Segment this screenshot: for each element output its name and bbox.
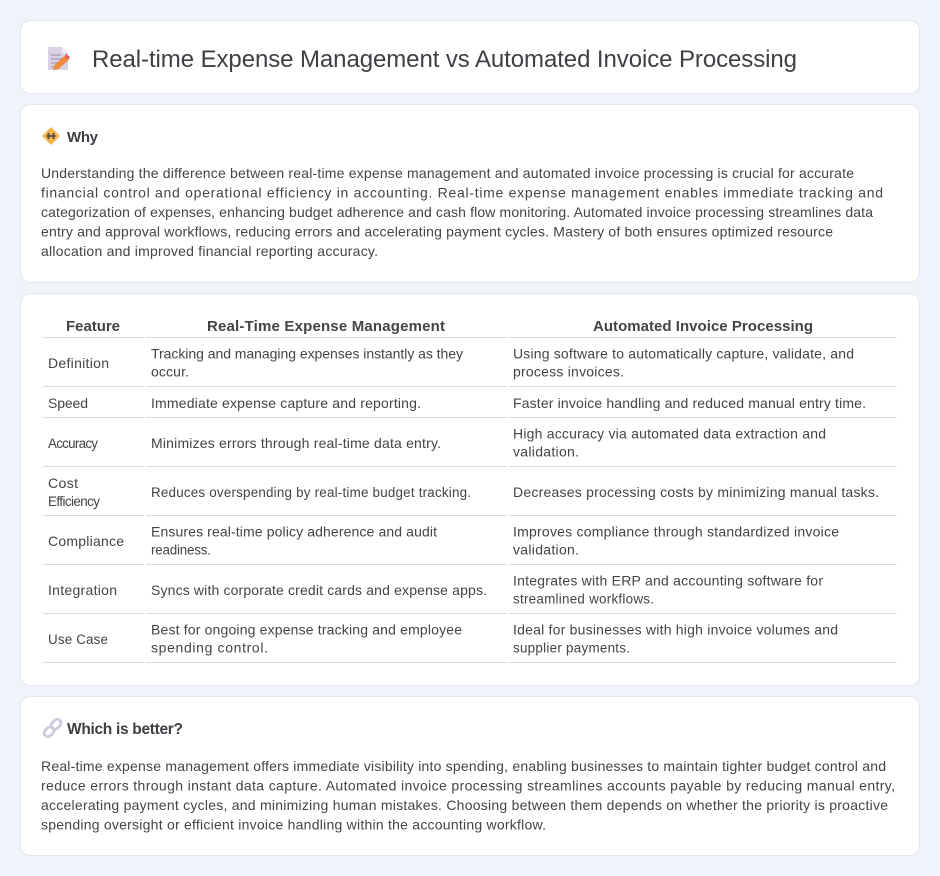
table header xyxy=(43,318,897,338)
conclusion paragraph: reduce errors through instant data capture. Automated invoice processing streamlines accounts payable by reducing manual entry, xyxy=(41,778,895,794)
icon: link xyxy=(42,718,63,738)
icon: warning diamond xyxy=(43,128,59,144)
conclusion paragraph: spending oversight or efficient invoice handling within the accounting workflow. xyxy=(41,816,546,832)
table header: Real-Time Expense Management xyxy=(207,318,445,335)
row: cost efficiency xyxy=(43,475,897,516)
row: integration: Syncs with corporate credit cards and expense apps. xyxy=(151,582,487,598)
row: speed xyxy=(43,395,897,418)
panel: which is better xyxy=(20,696,920,856)
why paragraph: allocation and improved financial reporting accuracy. xyxy=(41,243,378,259)
row: cost efficiency: Reduces overspending by real-time budget tracking. xyxy=(151,485,471,500)
row: accuracy: validation. xyxy=(513,444,579,460)
row: compliance xyxy=(43,524,897,565)
why paragraph: Understanding the difference between real-time expense management and automated invoice processing is crucial for accurate xyxy=(41,165,854,181)
row: compliance: validation. xyxy=(513,542,579,558)
why paragraph xyxy=(41,165,883,259)
why paragraph: categorization of expenses, enhancing budget adherence and cash flow monitoring. Automated invoice processing streamlines data xyxy=(41,204,873,220)
row: speed: Faster invoice handling and reduced manual entry time. xyxy=(513,395,866,411)
panel: title xyxy=(20,20,920,94)
row: cost efficiency: Cost xyxy=(48,475,78,491)
row: compliance: Ensures real-time policy adherence and audit xyxy=(151,524,437,540)
row: use case: Ideal for businesses with high invoice volumes and xyxy=(513,622,838,638)
conclusion paragraph xyxy=(41,758,895,832)
row: speed: Immediate expense capture and reporting. xyxy=(151,395,421,411)
row: integration xyxy=(43,572,897,614)
row: compliance: Compliance xyxy=(48,533,124,549)
row: integration: Integration xyxy=(48,582,117,598)
row: definition: occur. xyxy=(151,364,189,380)
icon: document with pencil xyxy=(48,47,70,70)
row: compliance: readiness. xyxy=(151,542,211,558)
why paragraph: financial control and operational efficiency in accounting. Real-time expense management enables immediate tracking and xyxy=(41,184,883,200)
heading: which is better: Which is better? xyxy=(67,721,183,738)
table header: Feature xyxy=(66,318,120,335)
row: accuracy: High accuracy via automated data extraction and xyxy=(513,426,826,442)
row: use case: Best for ongoing expense tracking and employee xyxy=(151,622,462,638)
row: definition: process invoices. xyxy=(513,364,624,380)
row: speed: Speed xyxy=(48,395,88,411)
table header: Automated Invoice Processing xyxy=(593,318,813,335)
row: use case: Use Case xyxy=(48,632,108,647)
row: cost efficiency: Decreases processing costs by minimizing manual tasks. xyxy=(513,484,879,500)
panel: why xyxy=(20,104,920,282)
row: accuracy: Minimizes errors through real-time data entry. xyxy=(151,435,441,451)
row: integration: streamlined workflows. xyxy=(513,592,654,606)
row: definition: Using software to automatically capture, validate, and xyxy=(513,346,854,362)
title text: Real-time Expense Management vs Automated Invoice Processing xyxy=(92,46,797,73)
conclusion paragraph: Real-time expense management offers immediate visibility into spending, enabling businesses to maintain tighter budget control and xyxy=(41,758,886,774)
row: definition: Tracking and managing expenses instantly as they xyxy=(151,346,463,362)
panel: comparison table xyxy=(20,294,920,686)
heading: why: Why xyxy=(67,129,99,146)
row: use case: spending control. xyxy=(151,640,268,656)
row: definition xyxy=(43,346,897,387)
conclusion paragraph: accelerating payment cycles, and minimizing human mistakes. Choosing between them depends on whether the priority is proactive xyxy=(41,797,888,813)
row: use case xyxy=(43,622,897,663)
row: cost efficiency: Efficiency xyxy=(48,494,100,509)
row: use case: supplier payments. xyxy=(513,640,630,656)
row: accuracy xyxy=(43,426,897,467)
row: compliance: Improves compliance through standardized invoice xyxy=(513,524,839,540)
row: integration: Integrates with ERP and accounting software for xyxy=(513,572,823,588)
row: accuracy: Accuracy xyxy=(48,436,98,451)
row: definition: Definition xyxy=(48,355,109,371)
why paragraph: entry and approval workflows, reducing errors and accelerating payment cycles. Mastery of both ensures optimized resource xyxy=(41,224,833,240)
